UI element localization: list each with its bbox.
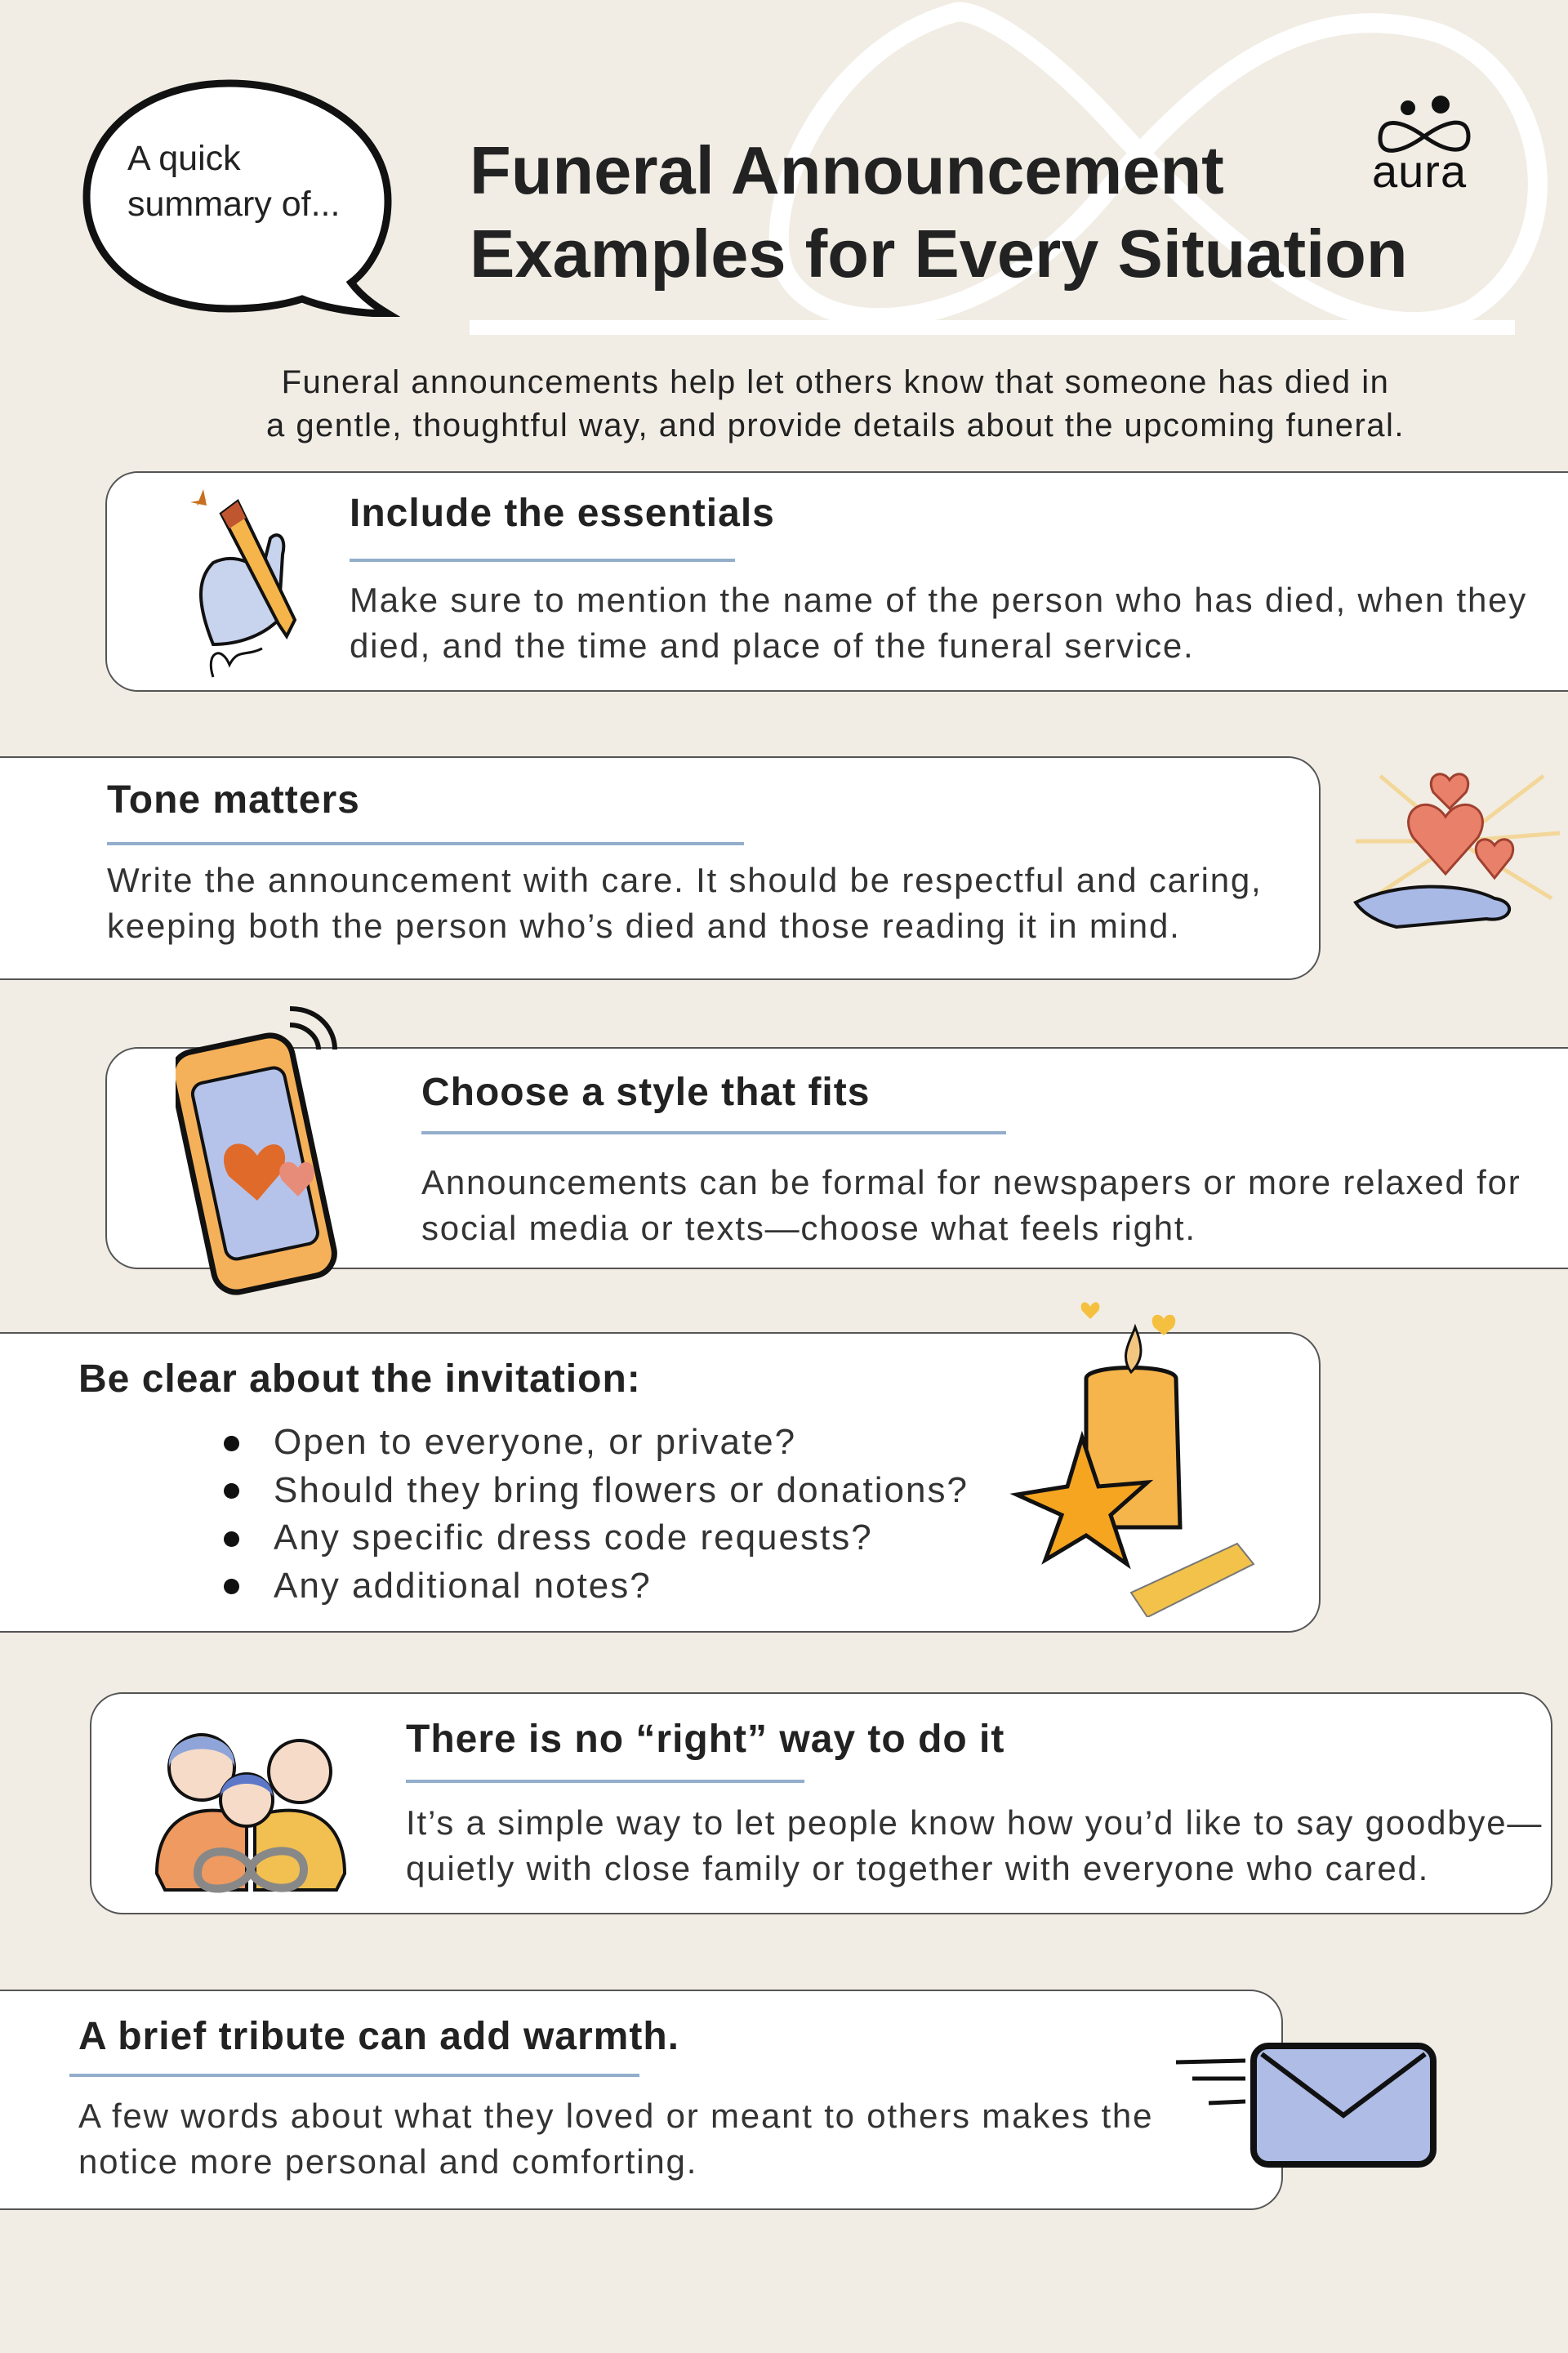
title: Examples for Every Situation bbox=[470, 216, 1408, 292]
bullet list bbox=[274, 1422, 969, 1606]
icon: phone bbox=[176, 1006, 337, 1295]
icon: envelope bbox=[1176, 2043, 1437, 2168]
panel: brief tribute: A brief tribute can add warmth. bbox=[78, 2015, 679, 2058]
title: Funeral Announcement bbox=[470, 132, 1224, 208]
icon: candle and star bbox=[1009, 1302, 1254, 1617]
panel: choose a style: social media or texts—choose what feels right. bbox=[421, 1209, 1196, 1247]
icon: hearts in hand bbox=[1353, 773, 1560, 929]
logo: aura: aura bbox=[1372, 145, 1467, 197]
bullet list: Should they bring flowers or donations? bbox=[274, 1470, 969, 1509]
title bbox=[470, 132, 1408, 292]
panel: tone matters: Tone matters bbox=[107, 778, 360, 822]
bullet list: Any additional notes? bbox=[274, 1565, 652, 1606]
panel: no right way: There is no “right” way to do it bbox=[406, 1718, 1004, 1761]
panel: be clear about the invitation: Be clear about the invitation: bbox=[78, 1357, 641, 1401]
panel: choose a style: Announcements can be formal for newspapers or more relaxed for bbox=[421, 1163, 1521, 1201]
panel: no right way bbox=[90, 1692, 1552, 1914]
panel: brief tribute bbox=[0, 1990, 1283, 2210]
icon: hand with pencil bbox=[190, 489, 297, 678]
panel: choose a style: Choose a style that fits bbox=[421, 1071, 870, 1114]
body text: Make sure to mention the name of the person who has died, when they bbox=[350, 581, 1527, 619]
panel: tone matters: Write the announcement with care. It should be respectful and caring, bbox=[107, 861, 1263, 899]
intro text: a gentle, thoughtful way, and provide details about the upcoming funeral. bbox=[266, 408, 1405, 443]
body text: died, and the time and place of the funeral service. bbox=[350, 626, 1195, 665]
panel: no right way: It’s a simple way to let people know how you’d like to say goodbye— bbox=[406, 1803, 1543, 1842]
panel: choose a style bbox=[105, 1047, 1568, 1269]
speech bubble bbox=[83, 80, 400, 317]
intro text bbox=[266, 364, 1405, 443]
panel: be clear about the invitation bbox=[0, 1332, 1321, 1633]
logo: aura bbox=[1372, 96, 1470, 197]
intro text: Funeral announcements help let others know that someone has died in bbox=[282, 364, 1389, 400]
bullet list: Any specific dress code requests? bbox=[274, 1517, 873, 1558]
speech bubble: summary of... bbox=[127, 185, 340, 224]
body text bbox=[350, 581, 1527, 665]
panel: brief tribute: A few words about what they loved or meant to others makes the bbox=[78, 2097, 1153, 2135]
panel: brief tribute: notice more personal and comforting. bbox=[78, 2142, 697, 2181]
panel: tone matters: keeping both the person who’s died and those reading it in mind. bbox=[107, 907, 1181, 945]
panel: no right way: quietly with close family or together with everyone who cared. bbox=[406, 1849, 1429, 1887]
panel: include the essentials bbox=[105, 471, 1568, 692]
bullet list: Open to everyone, or private? bbox=[274, 1422, 796, 1462]
speech bubble: A quick bbox=[127, 139, 241, 178]
panel: tone matters bbox=[0, 756, 1321, 980]
heading: Include the essentials bbox=[350, 492, 775, 535]
icon: family with infinity bbox=[155, 1733, 346, 1893]
background infinity ribbon bbox=[470, 2, 1548, 335]
